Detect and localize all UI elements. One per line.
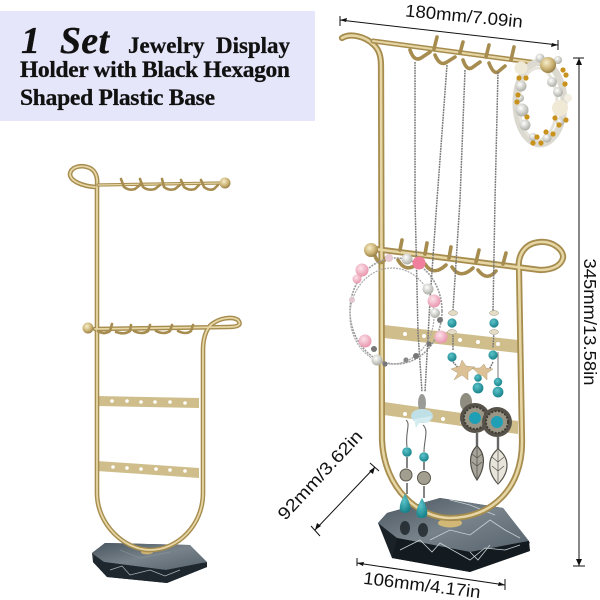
title line 3: Shaped Plastic Base [20, 85, 215, 111]
right balls [364, 57, 556, 257]
title line 2: Holder with Black Hexagon [20, 57, 290, 83]
left shelves [97, 396, 199, 478]
left stand: empty product view [70, 166, 240, 583]
dimension: height 345mm: 345mm/13.58in [580, 258, 600, 386]
pearl and gold bracelet [514, 54, 572, 146]
title line 1: Jewelry Display [128, 33, 290, 58]
right stand: product with jewelry [342, 36, 572, 572]
turquoise drop beads [473, 352, 503, 397]
starfish pendants [451, 360, 493, 380]
left balls [82, 178, 230, 334]
title panel [0, 11, 315, 121]
left base: hexagon marble [92, 543, 207, 583]
dimension: base 106mm [357, 558, 505, 600]
dimension: height 345mm [573, 58, 600, 566]
necklace chains [415, 62, 498, 392]
pink bead bracelet [349, 254, 448, 367]
dimension: width 180mm [340, 0, 558, 50]
right top hooks [410, 37, 514, 72]
left lower hooks [98, 324, 193, 333]
title: 1 Set: 1 Set [21, 20, 110, 62]
silver pendant and crystal [411, 394, 433, 428]
right lower hooks [375, 240, 506, 276]
left top hooks [121, 179, 218, 190]
necklace beads [447, 311, 499, 362]
left frame [70, 166, 240, 550]
right shelves [384, 325, 518, 434]
dimension: depth 92mm [273, 426, 379, 536]
filigree flower earrings [460, 393, 512, 451]
right base: hexagon marble [378, 498, 530, 572]
right frame [342, 36, 563, 518]
leaf charms [471, 446, 507, 484]
teardrop earrings [400, 420, 430, 518]
dimension: depth 92mm: 92mm/3.62in [273, 426, 367, 524]
dimension: width 180mm: 180mm/7.09in [404, 0, 524, 32]
